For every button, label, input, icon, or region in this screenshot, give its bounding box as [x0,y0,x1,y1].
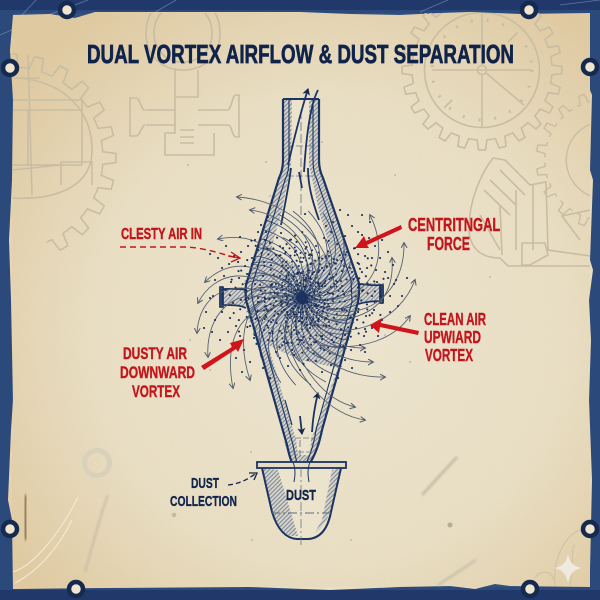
text: dusty air downward vortex: VORTEX [132,383,180,401]
text: centrifugal force: FORCE [427,234,470,254]
arrow: dusty air inlet [120,247,240,262]
inner spiral swirl [244,210,360,386]
label: dust collection [170,473,257,510]
text: clean air upward vortex: UPWIARD [424,327,481,347]
upper clean-air void [271,100,331,268]
separator vessel diagram [215,89,389,548]
sketch: left gear inner frame [12,55,92,198]
label: dusty air in [120,226,240,262]
label: centrifugal force [355,215,505,254]
text: clesty air in: CLESTY AIR IN [121,226,202,243]
arrow: dusty air downward [201,339,244,370]
vortex core [296,292,308,304]
sketch: large gear left [12,54,117,251]
text: centrifugal force: CENTRITNGAL [408,215,500,235]
text: dusty air downward vortex: DOWNWARD [120,364,195,382]
sketch: pressure gauge and valve [130,0,239,155]
vessel outlines [220,99,383,470]
text: clean air upward vortex: VORTEX [425,345,473,365]
dust bucket [257,462,346,548]
airflow arrows in neck [281,89,319,434]
dust particles [188,142,490,540]
sketch: second gear right [536,94,590,226]
text: clean air upward vortex: CLEAN AIR [424,309,486,329]
arrow: to dust bucket [228,473,257,485]
lower void [268,345,338,455]
sparkle watermark [554,554,582,583]
arrow: centrifugal force [355,225,402,248]
sketch: gauge gear upper right [402,0,562,150]
label: dusty air downward vortex [120,339,244,401]
text: dust collection: COLLECTION [170,493,237,510]
faint background sketches: gears and machinery [0,0,600,266]
label: clean air upward vortex [370,309,491,365]
sketch: machine housing right [469,158,590,266]
vessel hatched wall [220,99,384,463]
dust label in bucket: DUST [286,487,316,504]
outer curved airflow arrows [197,197,415,420]
paper marks: stains and scratches [13,450,580,586]
text: dust collection: DUST [191,475,219,492]
text: dusty air downward vortex: DUSTY AIR [123,345,187,363]
arrow: clean air upward [370,318,419,335]
